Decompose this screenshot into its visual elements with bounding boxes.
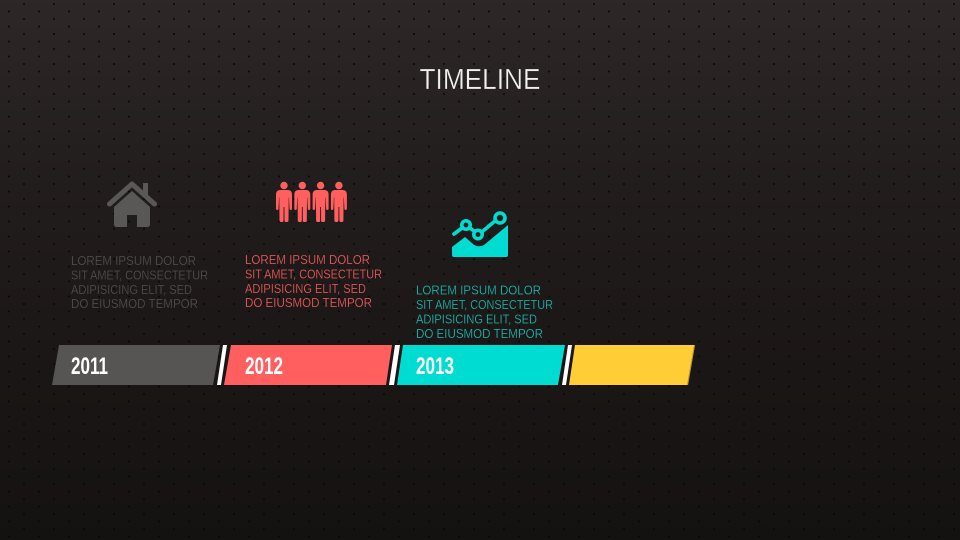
- divider slash 3: [562, 345, 572, 385]
- text block: 2013: SIT AMET, CONSECTETUR: [416, 298, 553, 312]
- text block: 2012: SIT AMET, CONSECTETUR: [245, 268, 382, 282]
- text block: 2013: LOREM IPSUM DOLOR: [416, 284, 541, 298]
- text block: 2012: [245, 253, 382, 310]
- segment: 2011: 2011: [71, 353, 108, 380]
- text block: 2011: SIT AMET, CONSECTETUR: [71, 268, 208, 282]
- timeline bar: [52, 345, 695, 385]
- text block: 2011: LOREM IPSUM DOLOR: [71, 254, 196, 268]
- panel: 2012: [245, 182, 382, 310]
- segment: 2013: 2013: [416, 353, 454, 380]
- text block: 2012: LOREM IPSUM DOLOR: [245, 253, 370, 267]
- divider slash 2: [389, 345, 400, 385]
- text block: 2011: DO EIUSMOD TEMPOR: [71, 297, 198, 311]
- text block: 2012: DO EIUSMOD TEMPOR: [245, 296, 372, 310]
- segment: 2012: 2012: [245, 353, 283, 380]
- text block: 2011: [71, 254, 208, 311]
- divider slash 1: [217, 345, 227, 385]
- text block: 2013: ADIPISICING ELIT, SED: [416, 312, 537, 326]
- text block: 2013: DO EIUSMOD TEMPOR: [416, 327, 543, 341]
- segment: 2012: [224, 345, 392, 385]
- text block: 2013: [416, 284, 553, 341]
- title: TIMELINE: [420, 64, 540, 96]
- segment: 2013: [397, 345, 565, 385]
- text block: 2011: ADIPISICING ELIT, SED: [71, 283, 192, 297]
- segment: 2011: [52, 345, 220, 385]
- panel: 2013: [416, 213, 553, 341]
- icon: four people: [276, 182, 347, 222]
- panel: 2011: [71, 183, 208, 311]
- icon: house: [110, 183, 154, 227]
- text block: 2012: ADIPISICING ELIT, SED: [245, 282, 366, 296]
- icon: growth chart: [452, 213, 508, 257]
- segment: blank yellow: [569, 345, 695, 385]
